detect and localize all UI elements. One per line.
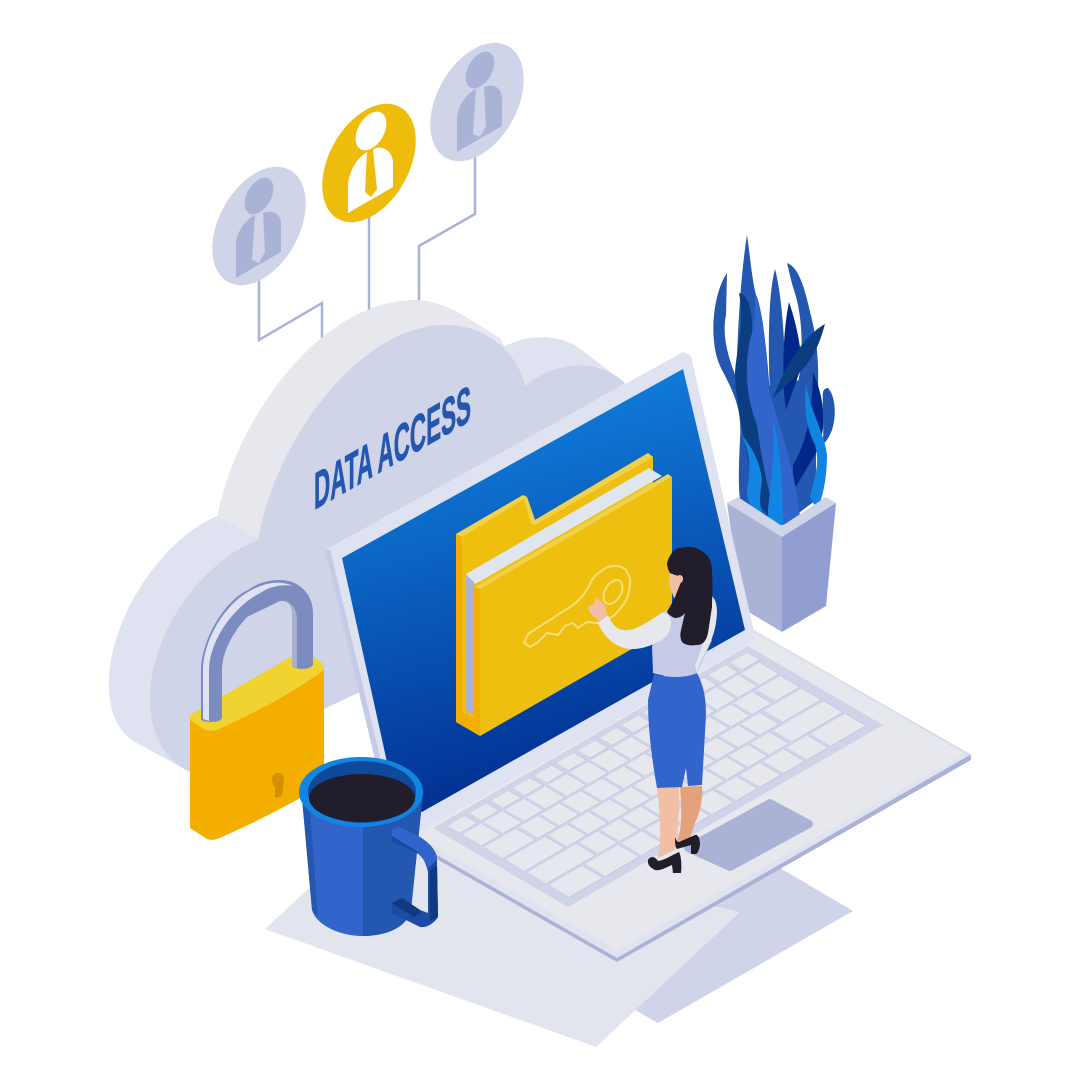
folder back: [456, 453, 653, 736]
laptop: [325, 352, 971, 962]
laptop lid bezel: [325, 352, 756, 832]
folder with key: [456, 453, 672, 736]
paper sheets: [265, 845, 853, 1047]
mug interior: [308, 761, 416, 823]
padlock top: [190, 656, 324, 731]
laptop base rim: [400, 625, 970, 958]
back arm sleeve: [695, 596, 717, 673]
laptop base edge: [400, 625, 971, 962]
back paper: [635, 868, 853, 1023]
leg front: [657, 787, 679, 858]
bezel inner strip: [325, 549, 380, 772]
keyboard keys: [448, 652, 870, 897]
padlock body: [190, 665, 324, 840]
cloud: DATA ACCESS: [314, 373, 471, 521]
mug left shade: [302, 798, 318, 917]
shoe front: [648, 852, 681, 873]
mug handle strip: [430, 866, 438, 921]
mug coffee: [309, 774, 415, 822]
icon: user right: [411, 27, 543, 177]
shackle highlight: [203, 583, 293, 721]
cloud big lobe side: [217, 300, 530, 560]
plant leaves: [713, 235, 835, 528]
front paper: [265, 845, 740, 1047]
hinge strip: [422, 630, 752, 822]
shackle band: [201, 580, 313, 722]
face: [669, 570, 684, 598]
padlock: [190, 580, 324, 840]
icon: user highlighted: [303, 88, 435, 238]
cloud: [109, 300, 625, 772]
padlock shackle: [201, 580, 313, 722]
ear: [677, 575, 683, 583]
mug rim: [299, 757, 423, 827]
padlock keyhole: [272, 773, 284, 798]
plant pot: [727, 497, 836, 632]
hair: [667, 547, 712, 645]
blouse: [652, 610, 712, 677]
mug handle lower end: [392, 898, 420, 917]
cloud front face: [150, 325, 625, 772]
coffee mug: [299, 757, 438, 936]
key outline: [524, 566, 630, 647]
folder back top edge: [456, 453, 653, 537]
folder spine: [456, 534, 480, 736]
folder front side: [474, 587, 480, 736]
mug handle: [392, 826, 438, 927]
mug handle top: [392, 826, 437, 868]
keyboard well: [433, 646, 883, 907]
cloud right lobe: [495, 337, 625, 480]
icon: user left: [193, 151, 325, 301]
folder paper top: [466, 468, 662, 584]
shackle inner shade: [285, 600, 297, 668]
folder front: [480, 477, 672, 736]
shoe back: [675, 835, 700, 854]
folder front top edge: [475, 474, 672, 589]
plant: [713, 235, 836, 632]
leg back: [677, 786, 702, 842]
cloud left lobe side: [109, 516, 260, 772]
mug body shade: [363, 793, 423, 936]
trackpad: [688, 803, 809, 867]
mug body: [302, 793, 423, 936]
laptop screen: [342, 369, 745, 812]
arm sleeve: [598, 613, 671, 649]
hand: [588, 597, 607, 622]
laptop base top: [405, 628, 965, 950]
woman: [588, 547, 717, 873]
skirt: [648, 673, 706, 788]
connector lines: [259, 155, 475, 345]
folder paper side: [466, 575, 474, 715]
